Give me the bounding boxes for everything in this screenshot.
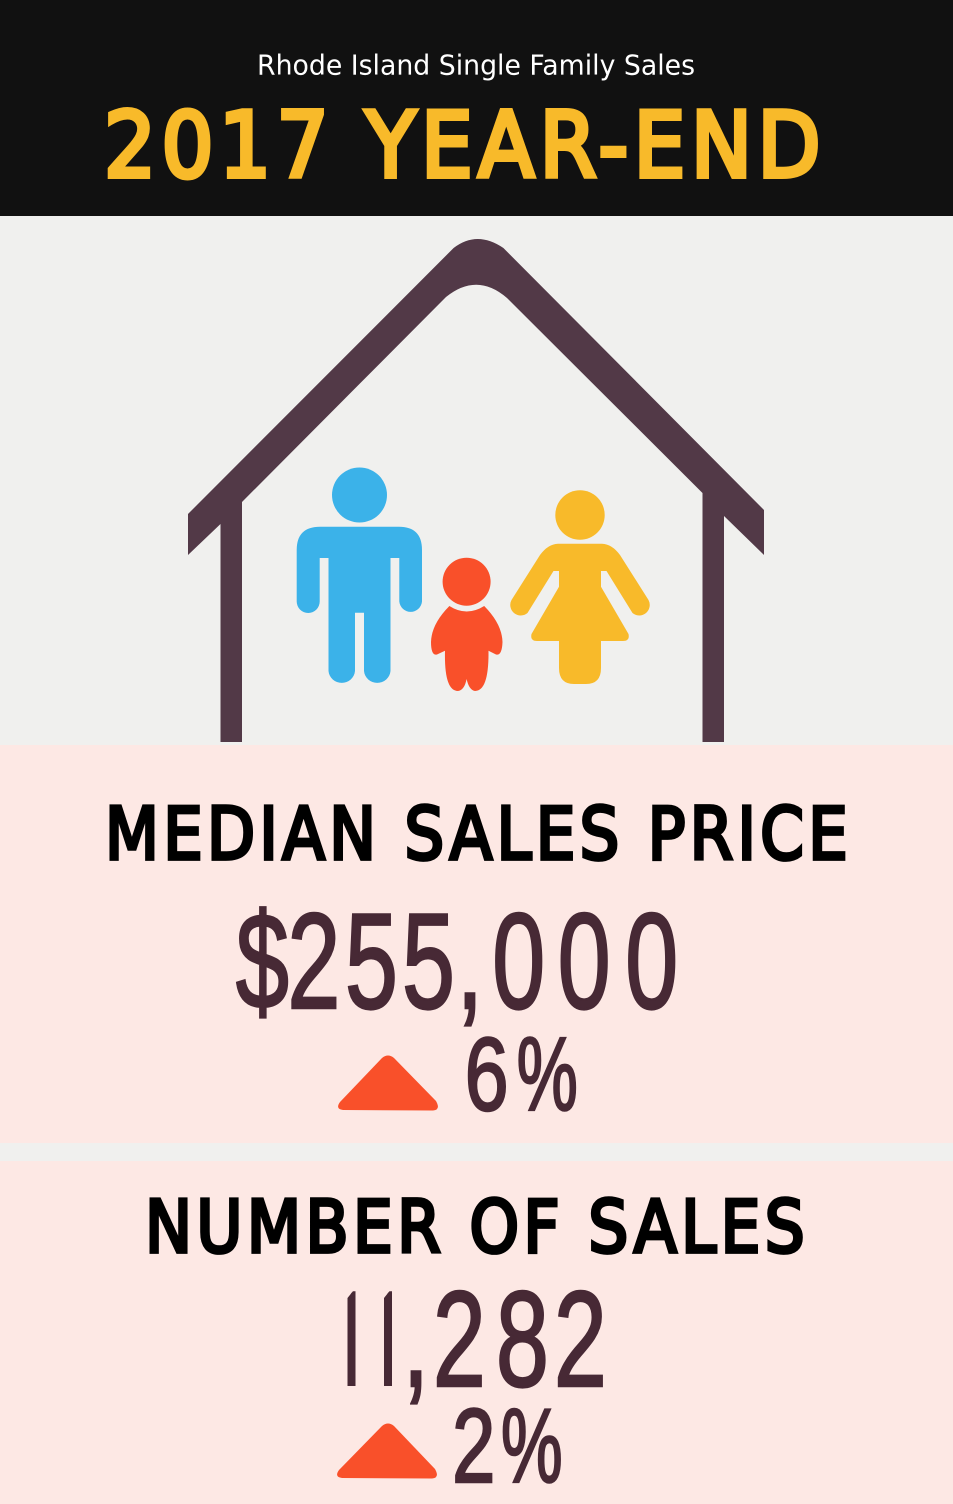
icon: up triangle <box>337 1424 437 1478</box>
header band <box>0 0 953 216</box>
icon: man <box>297 468 422 683</box>
icon: house with family <box>188 239 764 742</box>
heading: MEDIAN SALES PRICE <box>105 792 852 876</box>
change: 6 <box>465 1016 509 1133</box>
panel: number of sales <box>0 1161 953 1504</box>
change <box>452 1386 563 1504</box>
icon: woman <box>510 490 650 684</box>
subtitle: Rhode Island Single Family Sales <box>257 48 695 82</box>
change: % <box>517 1016 578 1132</box>
title: 2017 YEAR-END <box>104 94 826 198</box>
icon: child <box>431 558 502 691</box>
change: % <box>501 1386 563 1504</box>
value: $255,000 <box>236 885 678 1037</box>
icon: house outline <box>188 239 764 742</box>
icon: up triangle <box>338 1056 438 1110</box>
panel: median sales price <box>0 745 953 1143</box>
value: 11,282 <box>324 1263 607 1415</box>
change <box>465 1016 578 1133</box>
change: 2 <box>452 1387 495 1504</box>
heading: NUMBER OF SALES <box>145 1185 809 1269</box>
